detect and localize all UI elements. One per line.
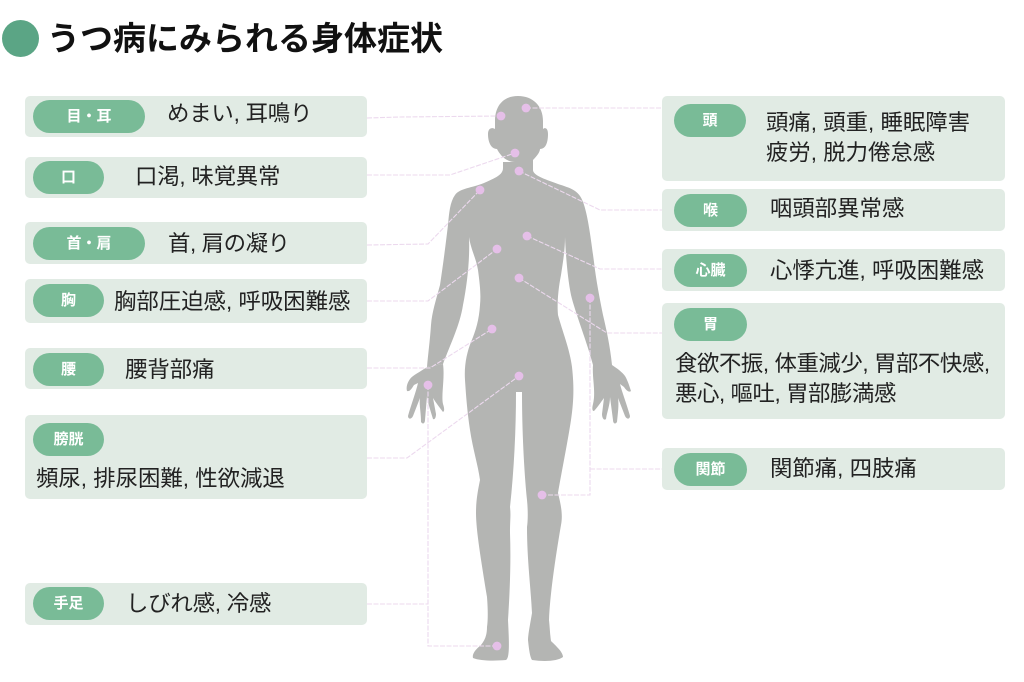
- panel: neck and shoulders: 首, 肩の凝り: [168, 231, 290, 256]
- panel: throat: 咽頭部異常感: [770, 196, 904, 221]
- panel: mouth: 口: [61, 169, 76, 186]
- panel: mouth: [25, 157, 367, 198]
- connector lines: [367, 108, 662, 646]
- panel: head: 頭: [702, 112, 718, 129]
- panel: lower back: 腰背部痛: [125, 357, 215, 382]
- symptom location dots: [424, 104, 594, 650]
- panel: heart: 心悸亢進, 呼吸困難感: [770, 258, 984, 283]
- panel: eyes and ears: [25, 96, 367, 137]
- panel: chest: [25, 279, 367, 323]
- panel: stomach: [662, 303, 1005, 419]
- panel: chest: 胸: [61, 292, 76, 309]
- panel: mouth: 口渇, 味覚異常: [135, 164, 280, 189]
- panel: hands and feet: [25, 583, 367, 625]
- panel: chest: 胸部圧迫感, 呼吸困難感: [114, 289, 350, 314]
- panel: throat: [662, 189, 1005, 231]
- panel: eyes and ears: 目・耳: [66, 108, 112, 125]
- panel: head: 疲労, 脱力倦怠感: [766, 140, 935, 165]
- panel: stomach: 悪心, 嘔吐, 胃部膨満感: [675, 381, 896, 406]
- panel: heart: [662, 249, 1005, 291]
- title: うつ病にみられる身体症状: [47, 20, 443, 57]
- panel: bladder: 頻尿, 排尿困難, 性欲減退: [36, 466, 285, 491]
- panel: lower back: 腰: [61, 361, 76, 378]
- panel: joints: 関節痛, 四肢痛: [770, 456, 917, 481]
- panel: joints: 関節: [695, 461, 726, 478]
- panel: stomach: 食欲不振, 体重減少, 胃部不快感,: [675, 351, 990, 376]
- panel: lower back: [25, 348, 367, 389]
- panel: throat: 喉: [703, 202, 718, 219]
- panel: bladder: [25, 415, 367, 499]
- panel: hands and feet: 手足: [53, 595, 84, 612]
- panel: hands and feet: しびれ感, 冷感: [126, 591, 271, 616]
- title icon: [2, 20, 39, 57]
- panel: stomach: 胃: [703, 316, 718, 333]
- panel: neck and shoulders: [25, 222, 367, 264]
- panel: eyes and ears: めまい, 耳鳴り: [167, 101, 312, 126]
- panel: heart: 心臓: [695, 262, 726, 279]
- panel: neck and shoulders: 首・肩: [66, 235, 112, 252]
- panel: head: [662, 96, 1005, 181]
- panel: joints: [662, 448, 1005, 490]
- body silhouette: [407, 96, 631, 661]
- panel: head: 頭痛, 頭重, 睡眠障害: [766, 110, 970, 135]
- panel: bladder: 膀胱: [53, 431, 84, 448]
